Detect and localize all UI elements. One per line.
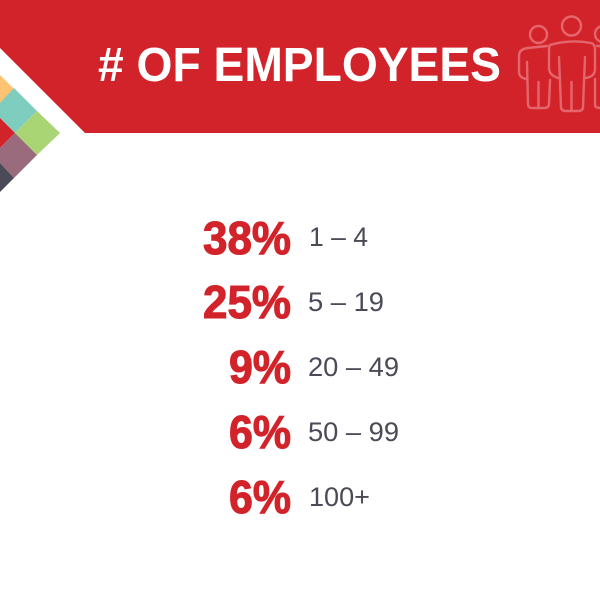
stat row: 100 plus <box>229 471 370 523</box>
stat row: 1 to 4 <box>203 212 368 264</box>
stat row: 100 plus: 100+ <box>309 482 370 512</box>
title: # OF EMPLOYEES <box>98 39 501 92</box>
header banner <box>0 0 600 133</box>
stat row: 50 to 99: 50 – 99 <box>308 417 399 447</box>
stat row: 50 to 99 <box>229 406 399 458</box>
stat row: 5 to 19: 25% <box>203 276 291 328</box>
stat row: 20 to 49: 9% <box>229 341 291 393</box>
stat row: 20 to 49 <box>229 341 399 393</box>
stat row: 5 to 19 <box>203 276 384 328</box>
stat row: 50 to 99: 6% <box>229 406 291 458</box>
stat row: 1 to 4: 1 – 4 <box>309 222 368 252</box>
icon: people <box>519 16 600 111</box>
stat row: 1 to 4: 38% <box>203 212 291 264</box>
stat row: 20 to 49: 20 – 49 <box>308 352 399 382</box>
stat row: 5 to 19: 5 – 19 <box>308 287 384 317</box>
diamond mosaic <box>0 75 60 192</box>
stat row: 100 plus: 6% <box>229 471 291 523</box>
